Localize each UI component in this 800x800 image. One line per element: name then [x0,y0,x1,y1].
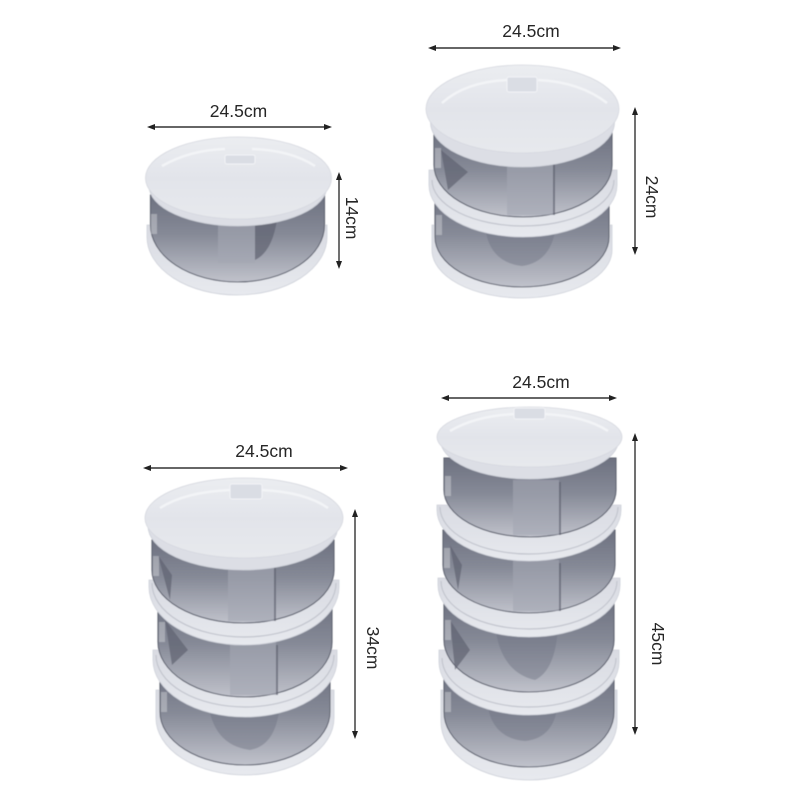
tier 2 band [153,650,337,717]
tier 1 window [444,458,616,537]
lid [426,65,619,153]
tier 1 band [437,505,621,561]
product: three-tier container [145,478,343,775]
lid rim [148,518,338,570]
tier 2 window [443,530,615,613]
tier 3 groove [442,658,616,707]
product: four-tier container [437,407,622,780]
tier 1 groove [152,583,336,637]
tier 3 band [439,650,619,715]
lid dome edge [442,80,607,103]
lid rim [440,437,618,479]
lid handle [514,408,545,419]
height dimension 2: 24cm [642,176,662,218]
window [150,195,324,282]
tier 2 groove [156,655,334,707]
lid rim [149,178,327,226]
lid dome edge [450,414,608,431]
width dimension 3: 24.5cm [235,441,293,461]
width dimension 4 [441,372,617,401]
tier 3 base ring [156,690,334,775]
tier 1 band [149,580,339,645]
tier 2 band [429,170,617,237]
lid rim [430,110,614,167]
lid dome edge [162,149,315,166]
lid [146,137,332,219]
lid handle [507,77,537,92]
product: one-tier container [146,137,332,295]
tier 4 window [444,670,614,767]
height dimension 3 [352,509,383,739]
lid [145,478,343,558]
product: two-tier container [426,65,619,298]
width dimension 2 [428,21,621,51]
tier 2 band [438,578,620,637]
width dimension 1 [147,101,332,130]
tier 4 base ring [441,690,617,780]
width dimension 2: 24.5cm [502,21,560,41]
width dimension 1: 24.5cm [210,101,267,121]
tier 2 groove [432,180,614,226]
height dimension 2 [632,107,662,255]
tier 2 window [158,600,332,697]
tier 1 window [434,130,612,217]
base ring [147,225,327,295]
lid [437,407,622,467]
lid handle [230,484,262,499]
tier 1 groove [440,507,618,554]
height dimension 1 [336,172,362,269]
lid handle [225,155,255,164]
lid dome edge [160,490,328,508]
height dimension 4: 45cm [648,623,668,665]
tier 3 window [444,600,614,692]
width dimension 4: 24.5cm [512,372,570,392]
height dimension 4 [632,433,668,735]
tier 2 window [435,190,609,287]
tier 3 window [160,670,330,765]
height dimension 3: 34cm [363,627,383,669]
tier 2 groove [441,581,617,629]
tier 1 window [152,540,334,623]
height dimension 1: 14cm [342,197,362,239]
width dimension 3 [143,441,348,471]
tier 2 base ring [432,225,612,298]
